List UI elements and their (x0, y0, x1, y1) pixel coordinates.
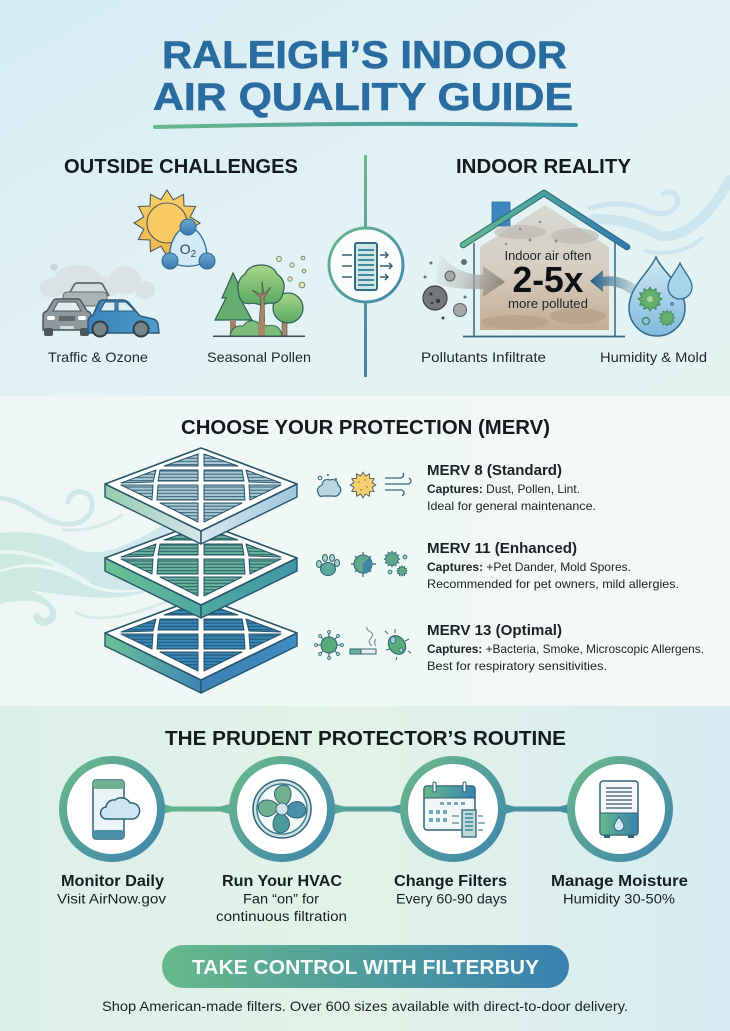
call to action button: TAKE CONTROL WITH FILTERBUY (192, 957, 540, 979)
step text: manage moisture: Humidity 30-50% (563, 892, 675, 906)
arrow: pollutants infiltrate (423, 253, 505, 320)
text: MERV 8: Ideal for general maintenance. (427, 499, 596, 513)
step text: change filters: Every 60-90 days (396, 892, 507, 906)
call to action button (162, 945, 569, 988)
icon: phone with cloud (63, 760, 161, 858)
step text: manage moisture (551, 873, 688, 906)
background: routine section (0, 706, 730, 1031)
text: MERV 11: Captures: +Pet Dander, Mold Spores. (427, 560, 631, 574)
icons: MERV 13 captures (314, 627, 411, 660)
labels: outside challenges and indoor reality: Pollutants Infiltrate (421, 349, 546, 365)
text: MERV 8: Captures: Dust, Pollen, Lint. (427, 482, 580, 496)
filter stack (105, 448, 297, 693)
callout: 2-5x more polluted: more polluted (508, 297, 588, 311)
icons: MERV 8 captures (318, 472, 411, 498)
MERV 13 filter (105, 597, 297, 693)
text: MERV 13 (427, 622, 704, 673)
step text: monitor daily (57, 873, 166, 906)
text: MERV 8 (427, 462, 596, 513)
step text: manage moisture: Manage Moisture (551, 873, 688, 890)
icon: calendar with filter (404, 760, 502, 858)
labels: outside challenges and indoor reality: Seasonal Pollen (207, 349, 311, 365)
text: MERV 8: MERV 8 (Standard) (427, 462, 562, 479)
heading: routine: THE PRUDENT PROTECTOR’S ROUTINE (165, 728, 566, 750)
footer text: Shop American-made filters. Over 600 sizes available with direct-to-door delivery. (102, 998, 628, 1014)
step text: run your HVAC: Run Your HVAC (222, 873, 342, 890)
icon: trees and pollen (213, 256, 306, 337)
step text: run your HVAC (216, 873, 347, 924)
icon: cars and smog (39, 264, 159, 336)
icon: sun and ozone: 2 (191, 249, 197, 260)
decoration: wind behind filters (0, 492, 205, 626)
background: top section (0, 0, 730, 396)
background: MERV band (0, 396, 730, 706)
decoration: wind swirl top right (590, 180, 730, 253)
step text: monitor daily: Monitor Daily (61, 873, 164, 890)
callout: 2-5x more polluted (504, 248, 592, 311)
arrow: humidity entering (590, 270, 637, 296)
icon: fan (233, 760, 331, 858)
text: MERV 13: Best for respiratory sensitivities. (427, 659, 607, 673)
heading: outside challenges: OUTSIDE CHALLENGES (64, 156, 298, 178)
title: RALEIGH’S INDOOR (162, 34, 567, 77)
MERV 11 filter (105, 522, 297, 618)
heading: choose your protection: CHOOSE YOUR PROTECTION (MERV) (181, 417, 550, 439)
step text: run your HVAC: Fan “on” for (243, 892, 320, 906)
text: MERV 11: MERV 11 (Enhanced) (427, 540, 577, 557)
text: MERV 13: Captures: +Bacteria, Smoke, Microscopic Allergens. (427, 642, 704, 656)
step text: change filters: Change Filters (394, 873, 507, 890)
step text: monitor daily: Visit AirNow.gov (57, 892, 166, 906)
text: MERV 13: MERV 13 (Optimal) (427, 622, 562, 639)
icon: dehumidifier (571, 760, 669, 858)
icon: water drops with mold (629, 257, 692, 336)
callout: 2-5x more polluted: 2-5x (512, 259, 584, 300)
title underline (155, 124, 576, 127)
routine connectors (152, 801, 580, 817)
title (153, 34, 573, 119)
icon: sun and ozone (134, 190, 215, 269)
labels: outside challenges and indoor reality: Humidity & Mold (600, 349, 707, 365)
MERV 8 filter (105, 448, 297, 544)
step text: run your HVAC: continuous filtration (216, 909, 347, 924)
text: MERV 11: Recommended for pet owners, mild allergies. (427, 577, 679, 591)
divider with filter badge (329, 155, 403, 377)
callout: 2-5x more polluted: Indoor air often (504, 248, 592, 263)
labels: outside challenges and indoor reality: Traffic & Ozone (48, 349, 148, 365)
icons: MERV 11 captures (316, 551, 407, 577)
text: MERV 11 (427, 540, 679, 591)
heading: indoor reality: INDOOR REALITY (456, 156, 632, 178)
step text: change filters (394, 873, 507, 906)
labels: outside challenges and indoor reality (48, 349, 707, 365)
icon: house with polluted air (463, 193, 627, 336)
title: AIR QUALITY GUIDE (153, 76, 573, 119)
icon: sun and ozone: O (180, 241, 191, 257)
